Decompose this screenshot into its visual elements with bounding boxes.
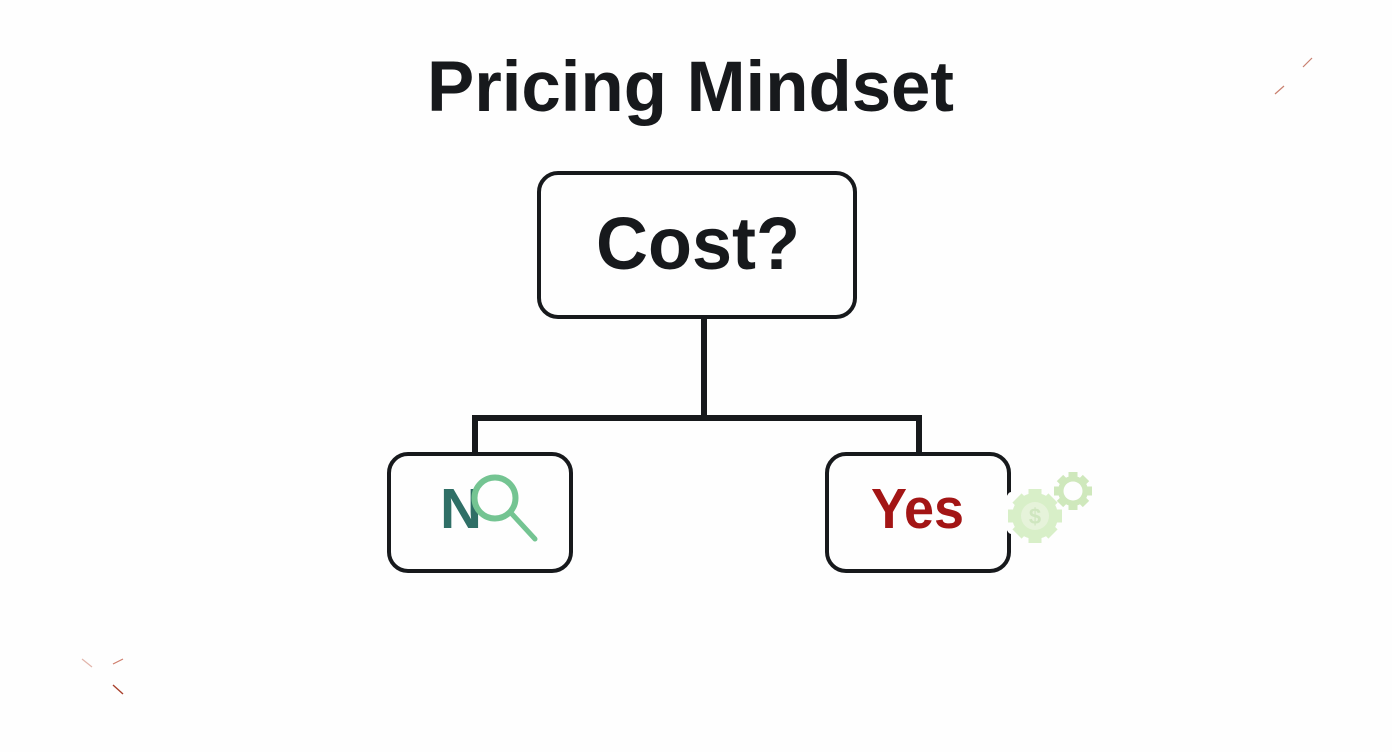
box: Cost?: Cost?	[596, 202, 800, 285]
box: Yes: Yes	[871, 477, 964, 541]
box: No	[389, 454, 571, 571]
box: Yes	[827, 454, 1009, 571]
box: Cost?	[539, 173, 855, 317]
icon: magnifying glass	[474, 478, 535, 539]
title: Pricing Mindset	[427, 48, 954, 127]
small gear	[1054, 472, 1092, 510]
icon: gears with dollar sign	[1004, 472, 1092, 543]
large gear: $	[1029, 504, 1041, 529]
letter N: N	[440, 477, 482, 541]
decoration: bottom left sparks	[82, 659, 123, 694]
decoration: top right sparks	[1275, 58, 1312, 94]
connector: tree lines	[475, 318, 919, 452]
